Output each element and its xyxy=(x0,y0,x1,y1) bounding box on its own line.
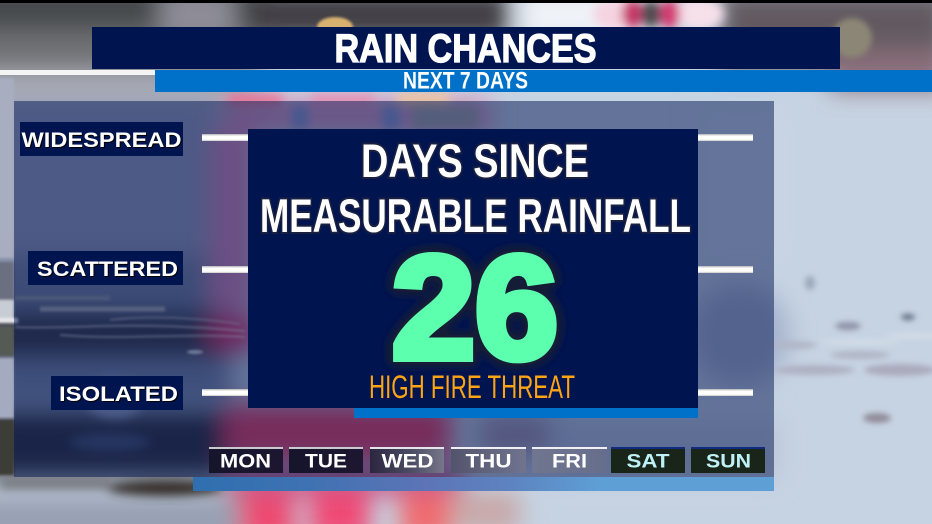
label: widespread xyxy=(20,122,183,156)
callout heading: DAYS SINCE xyxy=(361,134,589,187)
label: isolated: ISOLATED xyxy=(59,383,178,406)
day: tuesday xyxy=(289,447,363,473)
day: thursday: THU xyxy=(466,452,512,472)
bokeh light xyxy=(832,18,872,58)
title bar xyxy=(92,27,840,71)
medium blur details xyxy=(0,0,724,496)
day: saturday: SAT xyxy=(626,452,670,472)
day: sunday: SUN xyxy=(706,452,751,472)
blue strip under chart xyxy=(193,477,774,491)
fire threat label: HIGH FIRE THREAT xyxy=(369,369,575,405)
day: saturday xyxy=(611,447,685,473)
day: tuesday: TUE xyxy=(305,452,347,472)
day: monday: MON xyxy=(220,452,271,472)
label: scattered: SCATTERED xyxy=(37,258,178,281)
callout heading: MEASURABLE RAINFALL xyxy=(260,189,691,242)
white accent line xyxy=(0,70,155,75)
day: friday xyxy=(532,447,607,473)
callout heading xyxy=(260,134,691,242)
subtitle text: NEXT 7 DAYS xyxy=(403,68,528,94)
label: scattered: SCATTERED xyxy=(38,259,179,282)
round object at top xyxy=(317,17,353,37)
panel: chart backdrop xyxy=(14,101,774,477)
left edge strip xyxy=(0,78,18,475)
day: sunday xyxy=(691,447,765,473)
label: isolated: ISOLATED xyxy=(60,384,179,407)
callout: days since measurable rainfall xyxy=(248,129,698,418)
grid lines xyxy=(202,134,753,396)
day: monday xyxy=(209,447,283,473)
callout blue underline xyxy=(354,408,698,418)
day axis xyxy=(209,447,765,473)
callout heading: MEASURABLE RAINFALL xyxy=(260,189,691,242)
day: thursday xyxy=(451,447,526,473)
top black edge xyxy=(0,0,932,3)
label: isolated xyxy=(51,376,183,410)
big number: 26: 26 xyxy=(392,226,558,389)
label: scattered xyxy=(28,251,183,285)
day: wednesday: WED xyxy=(382,452,434,472)
water ripples xyxy=(773,276,932,423)
day: wednesday xyxy=(370,447,444,473)
callout heading: DAYS SINCE xyxy=(361,134,589,187)
day: friday: FRI xyxy=(552,452,587,472)
label: widespread: WIDESPREAD xyxy=(22,129,182,152)
title text: RAIN CHANCES xyxy=(334,27,596,71)
label: widespread: WIDESPREAD xyxy=(22,130,182,153)
subtitle bar xyxy=(155,68,932,94)
water ripples behind panel xyxy=(15,298,245,354)
big number: 26: 26 xyxy=(392,226,558,389)
